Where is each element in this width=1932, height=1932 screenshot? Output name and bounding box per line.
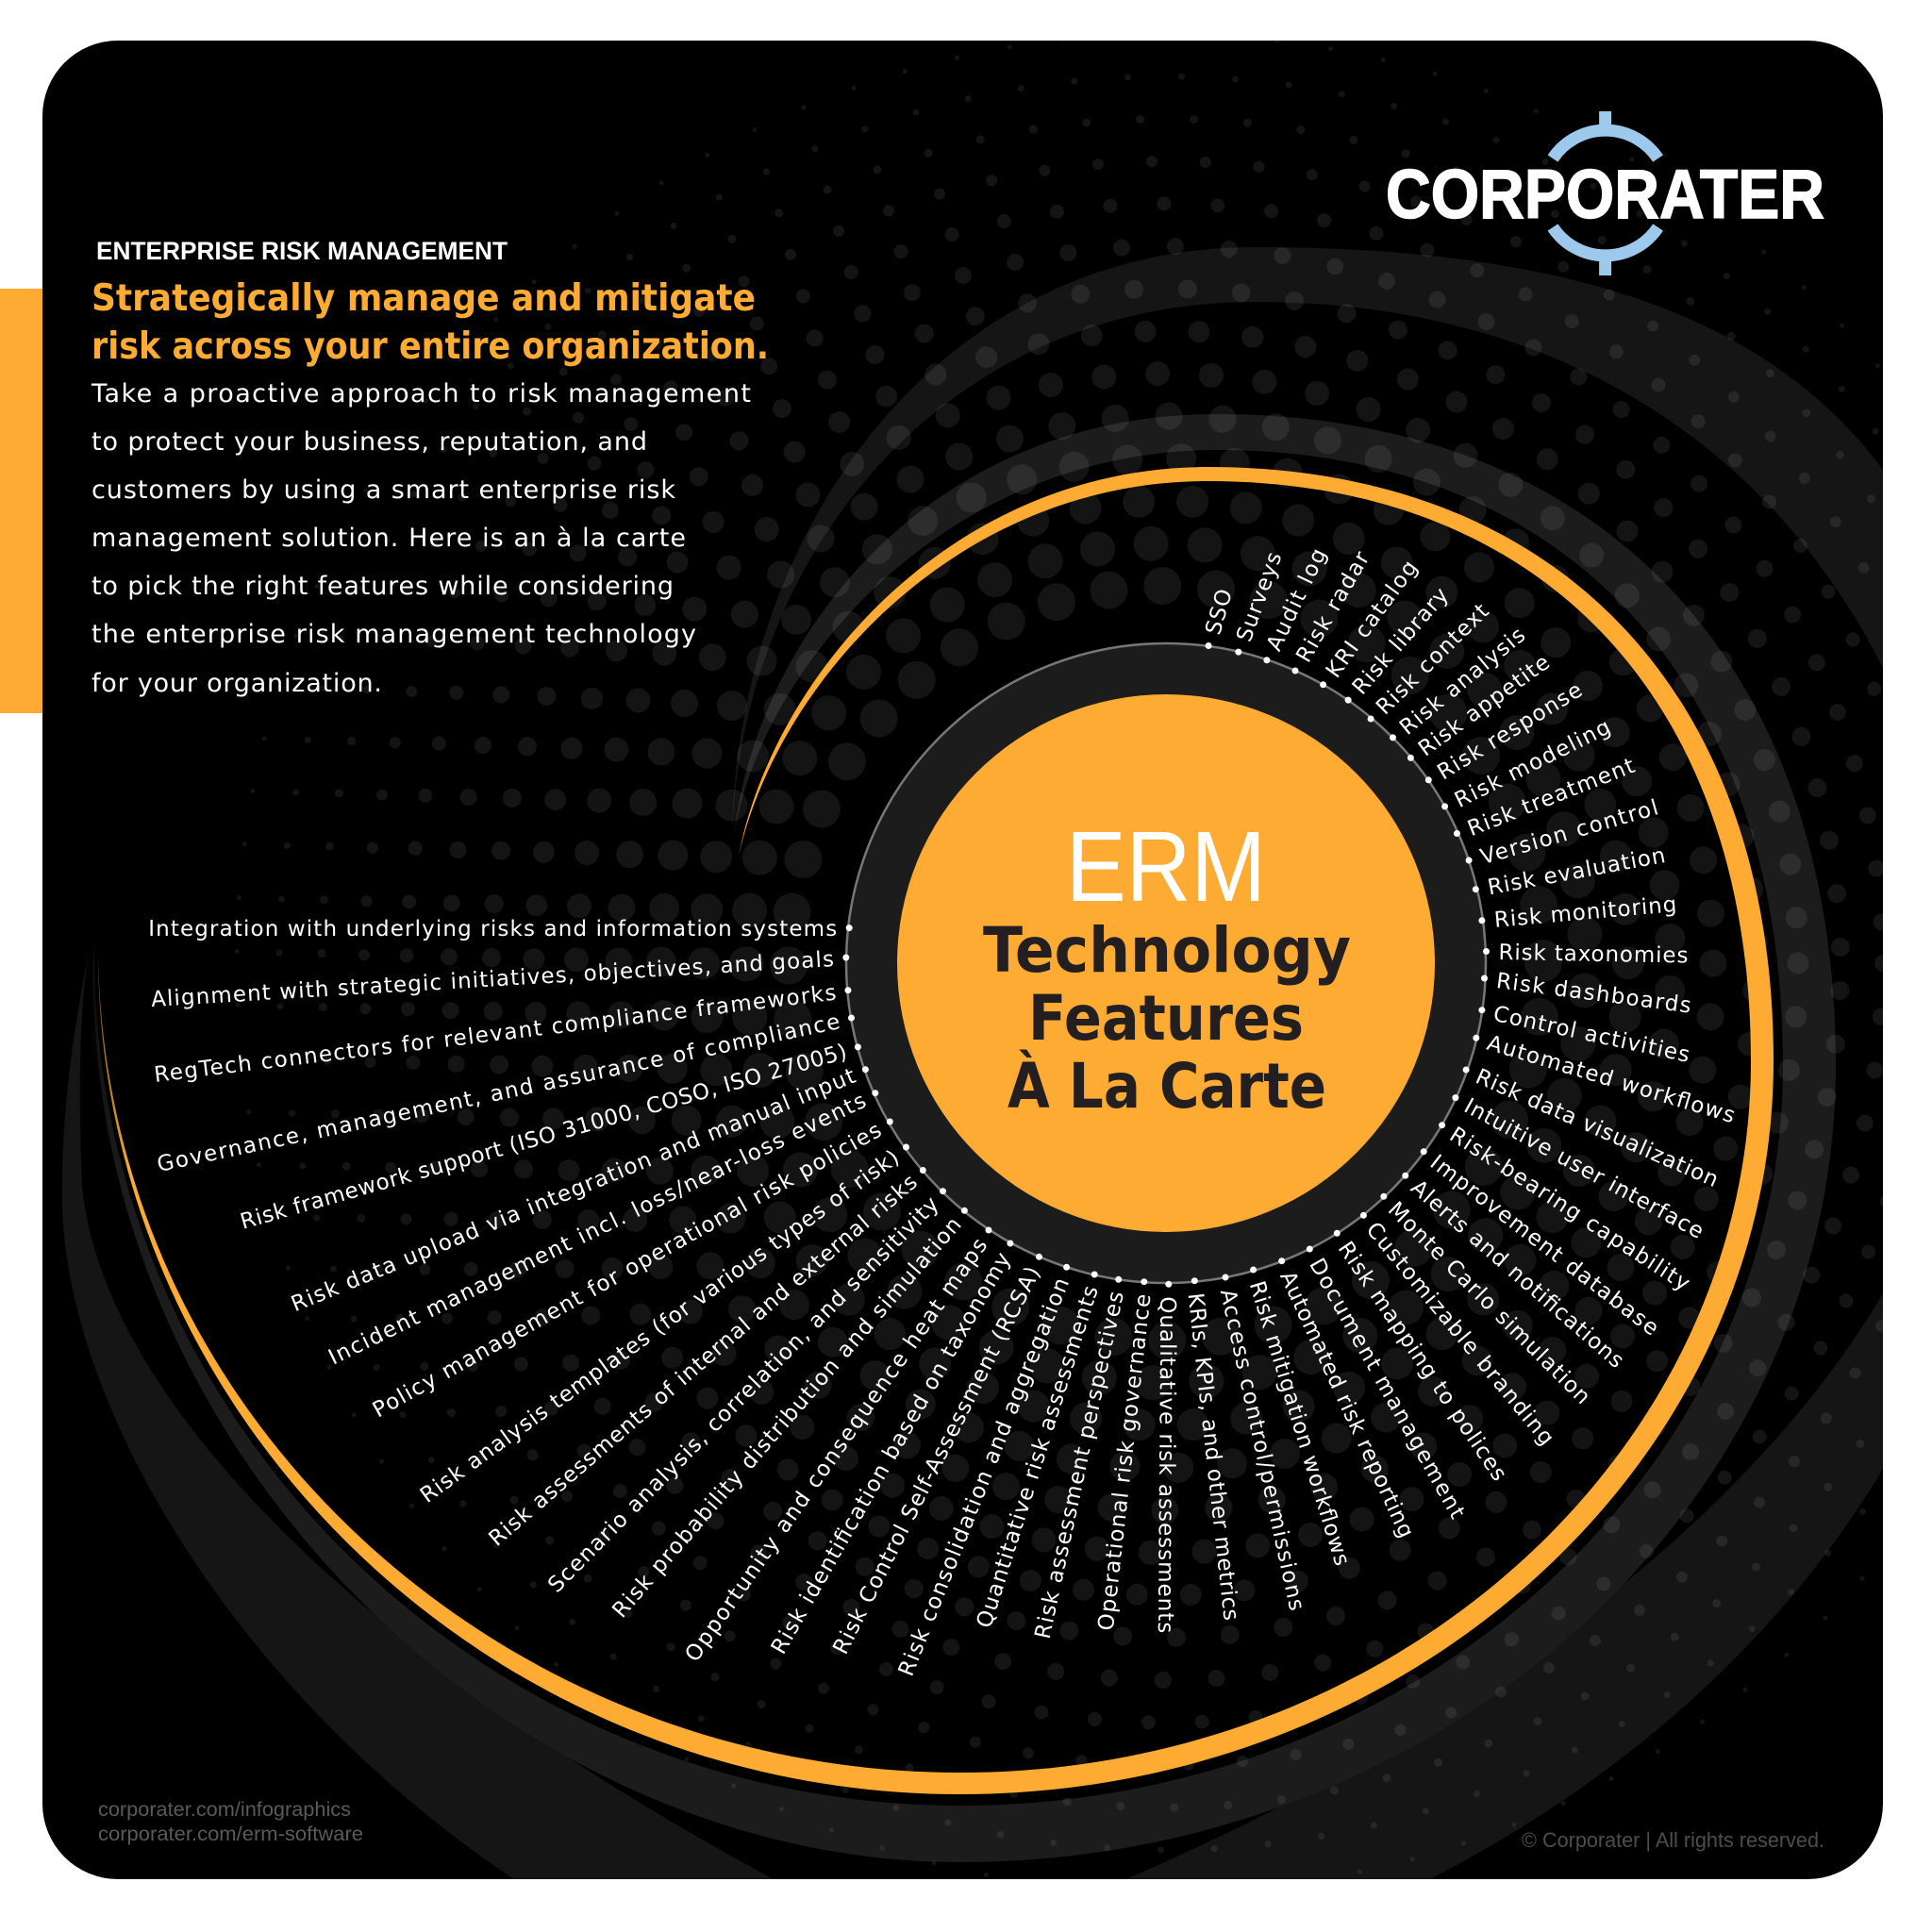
label: Automated workflows: Automated workflows bbox=[1484, 1031, 1738, 1128]
label: Risk framework support: Risk framework support (ISO 31000, COSO, ISO 27005) bbox=[238, 1040, 850, 1235]
centre title: ERM bbox=[1066, 811, 1266, 923]
intro paragraph: to protect your business, reputation, and bbox=[92, 427, 647, 457]
feature labels bbox=[148, 544, 1738, 1680]
logo crosshair ring bbox=[1553, 111, 1658, 275]
label: Risk mapping to polices: Risk mapping to polices bbox=[1333, 1238, 1511, 1486]
footer links: corporater.com/erm-software bbox=[98, 1824, 363, 1845]
intro paragraph: Take a proactive approach to risk management bbox=[91, 379, 751, 408]
label: Alerts and notifications: Alerts and notifications bbox=[1406, 1175, 1628, 1374]
centre title bbox=[983, 811, 1351, 1123]
label: Risk assessment perspectives: Risk assessment perspectives bbox=[1031, 1290, 1129, 1641]
label: KRIs, KPIs, and other metrics: KRIs, KPIs, and other metrics bbox=[1183, 1291, 1243, 1622]
inner grey spiral band bbox=[93, 414, 1836, 1862]
label: Risk analysis: Risk analysis bbox=[1395, 623, 1530, 741]
label: Risk data visualization: Risk data visualization bbox=[1472, 1064, 1722, 1192]
label: Quantitative risk assessments: Quantitative risk assessments bbox=[972, 1283, 1104, 1631]
label: Risk data upload via integration and manual input: Risk data upload via integration and manual input bbox=[288, 1064, 859, 1317]
label: Operational risk governance: Operational risk governance bbox=[1094, 1292, 1157, 1632]
label: Control activities: Control activities bbox=[1491, 1002, 1691, 1068]
orange spiral tail shade bbox=[94, 948, 127, 1193]
intro paragraph: for your organization. bbox=[92, 669, 382, 698]
label: Surveys: Surveys bbox=[1232, 549, 1288, 645]
label: Risk monitoring: Risk monitoring bbox=[1493, 892, 1677, 933]
label: Risk modeling: Risk modeling bbox=[1451, 715, 1615, 813]
label: Access control/permissions: Access control/permissions bbox=[1215, 1287, 1308, 1613]
label: Scenario analysis, correlation, and sensitivity: Scenario analysis, correlation, and sensitivity bbox=[543, 1192, 944, 1598]
label: Risk taxonomies: Risk taxonomies bbox=[1498, 941, 1689, 969]
copyright: © Corporater | All rights reserved. bbox=[1522, 1828, 1824, 1852]
label: Risk consolidation and aggregation: Risk consolidation and aggregation bbox=[894, 1274, 1074, 1680]
centre title: Features bbox=[1028, 982, 1304, 1055]
label: Risk assessments of internal and external risks: Risk assessments of internal and external risks bbox=[485, 1170, 923, 1552]
label: Opportunity and consequence heat maps: Opportunity and consequence heat maps bbox=[680, 1234, 992, 1667]
label: Version control: Version control bbox=[1477, 795, 1661, 870]
orange spiral bbox=[98, 467, 1774, 1794]
label: Risk identification based on taxonomy: Risk identification based on taxonomy bbox=[767, 1248, 1016, 1658]
label: Policy management for operational risk policies: Policy management for operational risk policies bbox=[369, 1118, 886, 1423]
intro paragraph: management solution. Here is an à la carte bbox=[92, 524, 686, 553]
intro paragraph: the enterprise risk management technology bbox=[92, 620, 696, 649]
label: Alignment with strategic initiatives: Alignment with strategic initiatives, objectives, and goals bbox=[150, 947, 835, 1012]
label: Automated risk reporting: Automated risk reporting bbox=[1274, 1268, 1418, 1541]
label: Risk dashboards: Risk dashboards bbox=[1495, 969, 1692, 1019]
label: Audit log: Audit log bbox=[1262, 544, 1332, 655]
label: Risk library: Risk library bbox=[1348, 583, 1454, 700]
label: Customizable branding: Customizable branding bbox=[1361, 1218, 1558, 1450]
label: Risk Control Self-Assessment (RCSA): Risk Control Self-Assessment (RCSA) bbox=[828, 1263, 1045, 1658]
centre title: À La Carte bbox=[1008, 1049, 1326, 1123]
intro paragraph: to pick the right features while considering bbox=[92, 572, 674, 601]
footer links bbox=[98, 1799, 363, 1845]
label: Risk-bearing capability: Risk-bearing capability bbox=[1445, 1123, 1694, 1296]
label: Intuitive user interface: Intuitive user interface bbox=[1459, 1094, 1707, 1244]
eyebrow heading: ENTERPRISE RISK MANAGEMENT bbox=[96, 237, 508, 265]
label: KRI catalog: KRI catalog bbox=[1322, 556, 1423, 683]
label: Integration with underlying risks: Integration with underlying risks and information systems bbox=[148, 917, 837, 941]
label: Qualitative risk assessments: Qualitative risk assessments bbox=[1153, 1296, 1179, 1633]
label: Risk probability distribution and simulation: Risk probability distribution and simulation bbox=[608, 1212, 967, 1623]
intro paragraph bbox=[91, 379, 751, 698]
centre title: Technology bbox=[983, 914, 1351, 987]
label: Risk analysis templates (for various types of risk): Risk analysis templates (for various types of risk) bbox=[416, 1145, 904, 1508]
main heading: risk across your entire organization. bbox=[92, 325, 769, 368]
label: SSO: SSO bbox=[1201, 587, 1238, 638]
label: Risk radar: Risk radar bbox=[1291, 547, 1375, 667]
orange side bar bbox=[0, 289, 42, 713]
main heading bbox=[92, 277, 769, 368]
footer links: corporater.com/infographics bbox=[98, 1799, 351, 1821]
label: RegTech connectors: RegTech connectors for relevant compliance frameworks bbox=[153, 981, 838, 1088]
label: Incident management incl. loss/near-loss events: Incident management incl. loss/near-loss events bbox=[325, 1089, 870, 1370]
label: Improvement database: Improvement database bbox=[1425, 1150, 1663, 1341]
label: Risk evaluation: Risk evaluation bbox=[1486, 843, 1667, 900]
centre orange disc bbox=[897, 694, 1435, 1232]
logo: Corporater bbox=[1386, 111, 1824, 275]
label: Risk treatment: Risk treatment bbox=[1464, 754, 1639, 841]
logo wordmark: CORPORATER bbox=[1386, 157, 1824, 233]
label: Monte Carlo simulation: Monte Carlo simulation bbox=[1383, 1197, 1595, 1409]
ring dots bbox=[842, 642, 1490, 1288]
centre ring bbox=[846, 643, 1486, 1283]
label: Document management: Document management bbox=[1304, 1255, 1470, 1523]
label: Risk mitigation workflows: Risk mitigation workflows bbox=[1244, 1278, 1354, 1569]
label: Risk appetite: Risk appetite bbox=[1414, 650, 1555, 761]
main heading: Strategically manage and mitigate bbox=[92, 277, 756, 320]
label: Risk response: Risk response bbox=[1433, 678, 1587, 785]
label: Governance, management, and assurance of compliance: Governance, management, and assurance of compliance bbox=[155, 1009, 842, 1177]
label: Risk context: Risk context bbox=[1372, 599, 1494, 720]
intro paragraph: customers by using a smart enterprise risk bbox=[92, 475, 675, 505]
